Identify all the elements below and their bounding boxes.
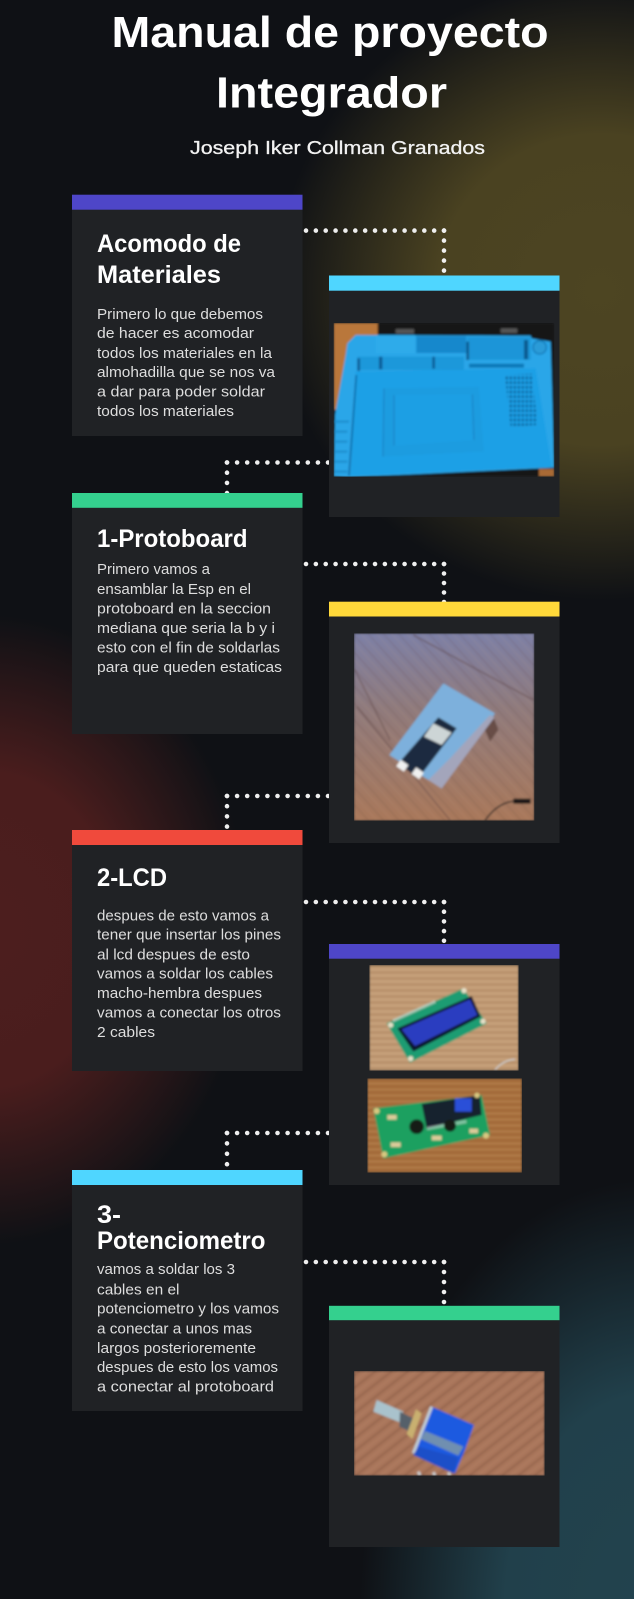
body text: lcd (97, 908, 281, 1041)
photo: esp on protoboard (354, 633, 534, 821)
heading: 2-lcd: 2-LCD (97, 864, 167, 892)
body text: lcd: vamos a soldar los cables (97, 966, 273, 983)
heading: 1-protoboard: 1-Protoboard (97, 525, 248, 553)
heading: 3-potenciometro: 3- (97, 1201, 121, 1229)
body text: acomodo: de hacer es acomodar (97, 325, 254, 342)
body text: acomodo: todos los materiales en la (97, 345, 273, 362)
heading: 3-potenciometro (97, 1201, 266, 1255)
body text: lcd: vamos a conectar los otros (97, 1004, 281, 1022)
body text: acomodo: a dar para poder soldar (97, 384, 265, 400)
body text: potenciometro: a conectar a unos mas (97, 1320, 252, 1337)
photo: lcd front (369, 965, 519, 1071)
heading: 3-potenciometro: Potenciometro (97, 1227, 266, 1255)
body text: protoboard: ensamblar la Esp en el (97, 581, 251, 598)
panel: photos of lcd (329, 944, 560, 1185)
body text: potenciometro: largos posterioremente (97, 1340, 256, 1357)
author subtitle: Joseph Iker Collman Granados (190, 138, 485, 158)
heading: acomodo de materiales: Acomodo de (97, 230, 241, 258)
body text: acomodo (97, 306, 276, 420)
body text: protoboard: protoboard en la seccion (97, 600, 271, 618)
title (112, 8, 548, 118)
panel: photo of protoboard (329, 602, 560, 843)
body text: potenciometro: a conectar al protoboard (97, 1378, 274, 1395)
body text: acomodo: almohadilla que se nos va (97, 364, 276, 381)
body text: potenciometro: potenciometro y los vamos (97, 1301, 279, 1318)
body text: potenciometro: vamos a soldar los 3 (97, 1261, 235, 1278)
photo: lcd back (367, 1078, 522, 1173)
body text: protoboard: mediana que seria la b y i (97, 620, 275, 637)
body text: acomodo: todos los materiales (97, 403, 234, 420)
photo: blue mat (334, 323, 554, 477)
body text: protoboard: esto con el fin de soldarlas (97, 639, 280, 656)
panel: 2-lcd (72, 830, 302, 1071)
panel: photo of potentiometer (329, 1306, 560, 1547)
body text: acomodo: Primero lo que debemos (97, 306, 263, 323)
body text: lcd: despues de esto vamos a (97, 908, 270, 924)
title: Manual de proyecto (112, 8, 548, 57)
panel: 1-protoboard (72, 493, 302, 734)
body text: lcd: al lcd despues de esto (97, 946, 250, 963)
body text: potenciometro: cables en el (97, 1281, 180, 1298)
body text: protoboard: Primero vamos a (97, 561, 211, 578)
panel: photo of blue soldering mat (329, 276, 560, 517)
body text: lcd: tener que insertar los pines (97, 927, 281, 944)
body text: lcd: 2 cables (97, 1024, 155, 1041)
body text: protoboard: para que queden estaticas (97, 659, 282, 676)
body text: potenciometro: despues de esto los vamos (97, 1359, 278, 1376)
photo: potentiometer (354, 1371, 545, 1476)
body text: protoboard (97, 561, 282, 676)
title: Integrador (216, 68, 447, 118)
body text: potenciometro (97, 1261, 279, 1395)
panel: acomodo de materiales (72, 195, 302, 436)
body text: lcd: macho-hembra despues (97, 985, 262, 1002)
heading: acomodo de materiales (97, 230, 241, 289)
heading: acomodo de materiales: Materiales (97, 261, 221, 289)
dotted connectors between panels (226, 231, 444, 1304)
panel: 3-potenciometro (72, 1170, 302, 1411)
